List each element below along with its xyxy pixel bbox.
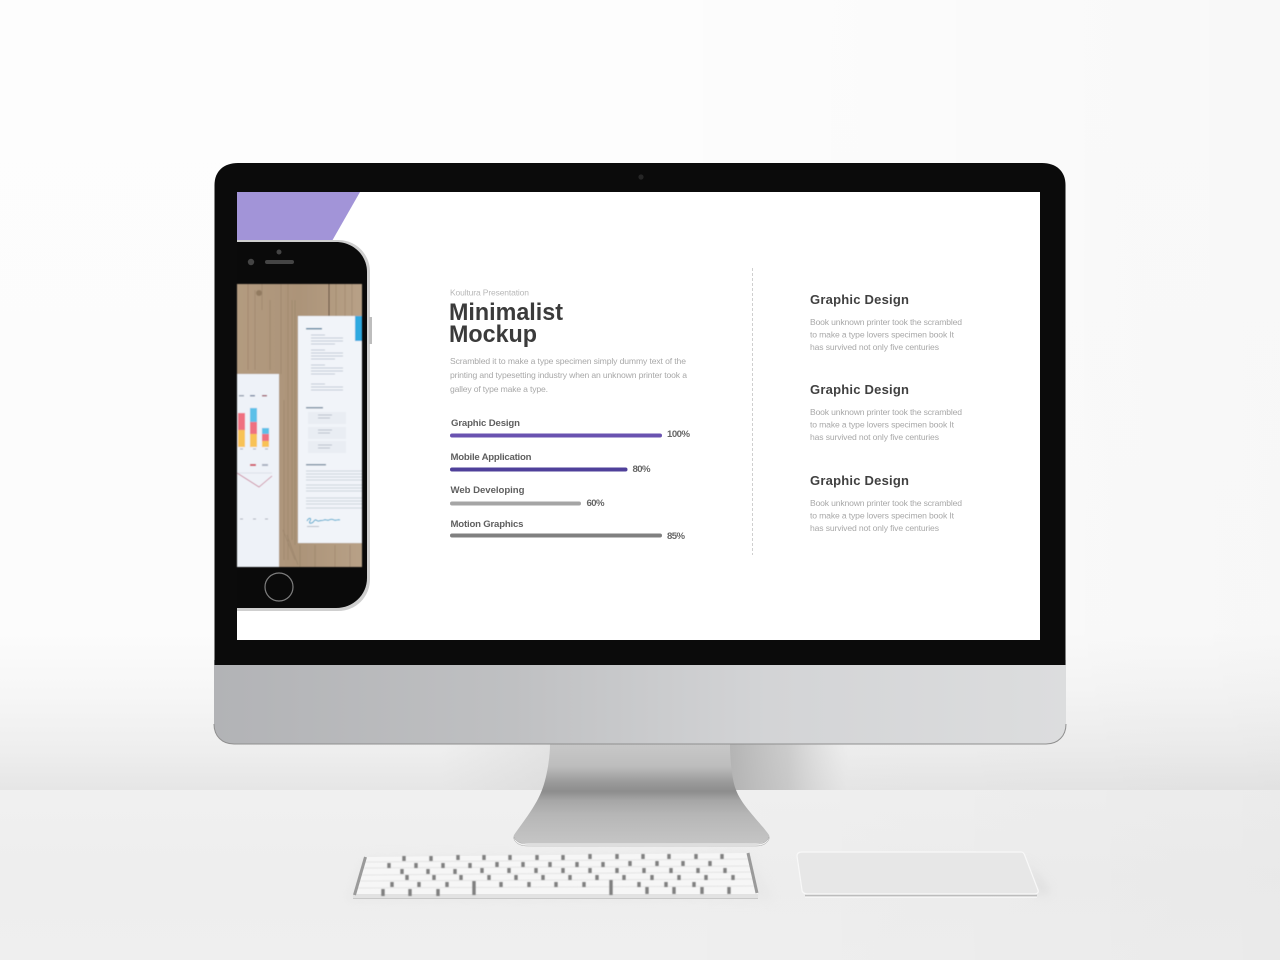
feature block 3 [810,473,962,533]
dashed divider [752,268,754,555]
title: Minimalist [449,299,563,326]
title [449,299,563,348]
slide text [449,288,962,542]
intro paragraph: printing and typesetting industry when an unknown printer took a [450,370,687,380]
monitor stand [513,744,770,846]
key gaps [383,854,733,896]
skill: graphic design: Graphic Design [451,418,520,429]
line chart [237,473,272,487]
base front edge [514,837,769,846]
skill: mobile application: Mobile Application [450,452,532,463]
title: Mockup [449,321,537,348]
keyboard side edges [354,857,366,895]
skill: mobile application: 80% [632,464,651,475]
skill: graphic design: 100% [667,429,690,440]
feature block 1 [810,292,962,352]
feature block 2: has survived not only five centuries [810,432,939,442]
phone mockup [237,240,372,611]
intro paragraph: galley of type make a type. [450,384,548,394]
feature block 2: Book unknown printer took the scrambled [810,407,962,417]
skill: motion graphics [450,519,685,542]
shadow of monitor on wall [440,744,848,790]
side button [369,317,372,344]
right paper [298,316,362,543]
skill: web developing [450,485,605,509]
intro paragraph [450,356,687,394]
monitor chin [214,660,1066,744]
monitor [214,163,1066,744]
wood grain [248,284,352,567]
feature block 1: has survived not only five centuries [810,342,939,352]
feature block 3: Book unknown printer took the scrambled [810,498,962,508]
purple corner shape [237,192,360,241]
skill: motion graphics: Motion Graphics [450,519,524,530]
trackpad [797,852,1052,898]
feature block 1: to make a type lovers specimen book It [810,330,955,340]
key row lines [356,859,756,888]
screen [237,192,1040,640]
feature block 2 [810,382,962,442]
eyebrow: Koultura Presentation [450,288,529,298]
feature block 2: Graphic Design [810,382,909,397]
feature block 2: to make a type lovers specimen book It [810,420,955,430]
stacked bars [238,408,269,447]
left paper [237,374,279,567]
skill: mobile application [450,452,651,475]
skill: graphic design [450,418,690,440]
phone screen photo [237,284,362,567]
front camera and speaker [248,250,294,265]
skill: web developing: Web Developing [450,485,525,496]
home button [265,573,293,601]
feature block 1: Graphic Design [810,292,909,307]
phone body [237,240,370,611]
feature block 3: to make a type lovers specimen book It [810,510,955,520]
webcam [638,174,644,180]
monitor bezel [214,163,1066,665]
feature block 3: has survived not only five centuries [810,523,939,533]
stand neck and base [513,744,770,843]
skill: web developing: 60% [586,498,605,509]
feature block 1: Book unknown printer took the scrambled [810,317,962,327]
feature block 3: Graphic Design [810,473,909,488]
keyboard [345,853,775,902]
skill bars [450,418,690,542]
skill: motion graphics: 85% [667,531,685,542]
intro paragraph: Scrambled it to make a type specimen simply dummy text of the [450,356,686,366]
